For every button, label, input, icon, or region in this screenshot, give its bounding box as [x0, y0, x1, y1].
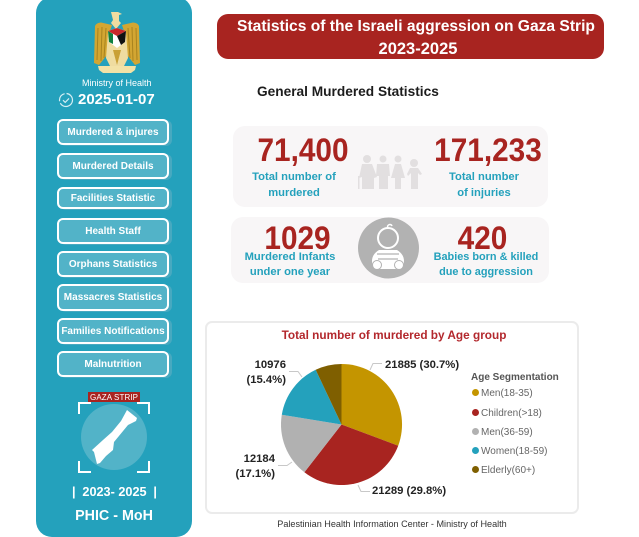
footer: Palestinian Health Information Center - Ministry of Health — [277, 519, 507, 529]
button: Murdered Details: Murdered Details — [72, 161, 154, 172]
heading: general statistics: General Murdered Statistics — [257, 84, 439, 99]
legend: Men(36-59): Men(36-59) — [481, 426, 533, 438]
panel: pie chart card — [205, 321, 579, 514]
label: total injuries — [449, 171, 519, 199]
button: Murdered & injures: Murdered & injures — [67, 127, 159, 138]
title banner — [217, 14, 604, 59]
text: years: 2023- 2025 — [82, 485, 147, 499]
title banner: 2023-2025 — [379, 40, 457, 58]
button: Malnutrition — [57, 351, 169, 377]
icon: baby — [358, 218, 419, 278]
label: total murdered: murdered — [268, 187, 320, 199]
pie label: women — [246, 359, 286, 386]
button: Facilities Statistic: Facilities Statistic — [71, 193, 155, 204]
button: Families Notifications: Families Notifications — [61, 326, 165, 337]
panel: totals — [233, 126, 548, 207]
number: total injuries: 171,233 — [434, 132, 542, 168]
label: total injuries: Total number — [449, 171, 519, 183]
button: Health Staff — [57, 218, 169, 244]
icon: Gaza Strip map — [78, 392, 150, 473]
number: infants: 1029 — [264, 220, 331, 256]
label: infants: under one year — [250, 266, 330, 278]
panel: infants — [231, 217, 549, 283]
pie label: men 36-59: 12184 — [244, 453, 275, 465]
icon: Gaza Strip map: GAZA STRIP — [90, 393, 138, 402]
legend: Men(18-35): Men(18-35) — [481, 388, 533, 398]
pie label: men 36-59 — [235, 453, 275, 480]
pie label: children: 21289 (29.8%) — [372, 485, 446, 497]
button: Massacres Statistics: Massacres Statistics — [64, 292, 162, 303]
legend: Women: Women(18-59) — [481, 446, 548, 456]
label: total murdered — [252, 171, 336, 199]
label: babies: due to aggression — [439, 266, 533, 278]
button: Malnutrition: Malnutrition — [84, 359, 142, 370]
text: date: 2025-01-07 — [78, 91, 155, 108]
button: Murdered Details — [57, 153, 169, 179]
legend: Elderly: Elderly(60+) — [481, 464, 535, 476]
button: Health Staff: Health Staff — [85, 226, 141, 237]
button: Murdered & injures — [57, 119, 169, 145]
text: PHIC - MoH: PHIC - MoH — [75, 508, 153, 524]
text: years: | — [72, 485, 76, 499]
label: babies: Babies born & killed — [434, 251, 538, 263]
legend: Children: Children(>18) — [481, 408, 542, 418]
pie label: women: (15.4%) — [246, 374, 286, 386]
pie label: men 18-35: 21885 (30.7%) — [385, 359, 459, 371]
icon: eagle emblem — [94, 12, 140, 73]
chart title: Total number of murdered by Age group — [282, 328, 506, 342]
label: total injuries: of injuries — [457, 187, 511, 199]
icon: date check — [58, 92, 74, 108]
button: Facilities Statistic — [57, 187, 169, 209]
label: infants: Murdered Infants — [245, 251, 335, 263]
number: total murdered: 71,400 — [257, 132, 349, 168]
pie chart — [278, 363, 402, 492]
label: total murdered: Total number of — [252, 171, 336, 183]
title banner: Statistics of the Israeli aggression on Gaza Strip — [237, 18, 595, 35]
label: babies — [434, 251, 538, 278]
text: years: | — [153, 485, 157, 499]
pie label: men 36-59: (17.1%) — [235, 468, 275, 480]
button: Families Notifications — [57, 318, 169, 344]
number: babies: 420 — [458, 220, 507, 256]
panel: sidebar — [36, 0, 192, 537]
pie label: women: 10976 — [255, 359, 286, 371]
button: Massacres Statistics — [57, 284, 169, 311]
button: Orphans Statistics: Orphans Statistics — [69, 259, 157, 270]
text: ministry of health: Ministry of Health — [82, 78, 152, 88]
label: infants — [245, 251, 335, 278]
button: Orphans Statistics — [57, 251, 169, 277]
legend title: Age Segmentation — [471, 372, 559, 383]
icon: family — [358, 155, 422, 189]
